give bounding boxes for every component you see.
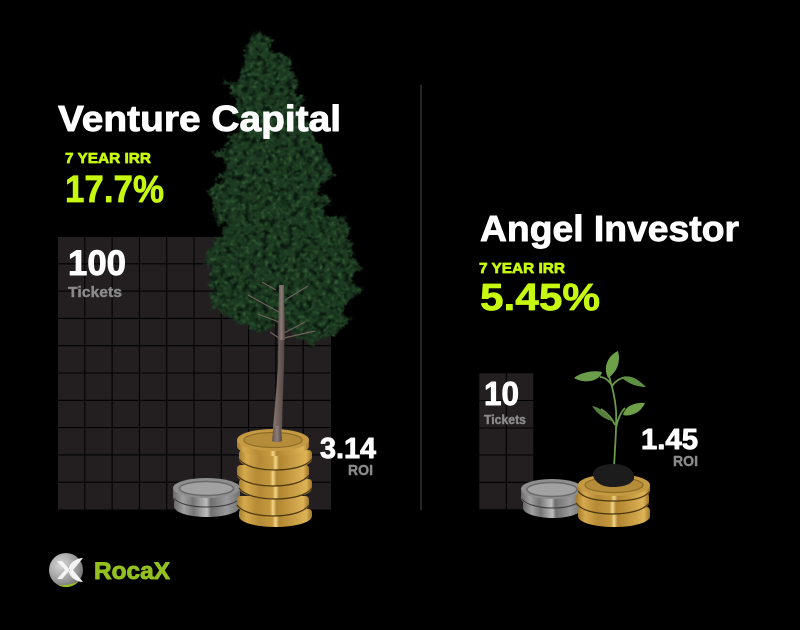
icon: pine tree: [204, 29, 360, 441]
icon: angel gold coin stack: [576, 474, 650, 527]
coin dividers: [576, 491, 650, 514]
label: angel 7 year irr: 7 YEAR IRR: [479, 260, 565, 277]
value: venture irr: 17.7%: [65, 169, 164, 211]
icon: venture silver coins: [173, 478, 240, 517]
leaf lower right: [623, 403, 645, 415]
icon: angel silver coins: [521, 479, 583, 518]
leaf left: [574, 371, 602, 381]
icon: logo mark: [49, 553, 83, 587]
icon: venture gold coin stack: [237, 426, 312, 527]
coin 6: [239, 509, 312, 527]
title: venture capital: Venture Capital: [58, 98, 341, 139]
stem: [600, 376, 626, 468]
coin 2: [239, 450, 312, 470]
label: venture tickets: Tickets: [68, 285, 122, 301]
value: angel roi: 1.45: [641, 424, 698, 456]
coin top rim: [244, 432, 302, 448]
coin 1: [237, 441, 309, 456]
tree base: [272, 426, 282, 442]
upper coin: [578, 486, 650, 501]
logo wordmark: RocaX: [94, 558, 170, 585]
leaf right: [622, 376, 646, 387]
value: venture tickets: 100: [68, 244, 126, 283]
upper trunk over foliage: [278, 285, 285, 340]
value: angel tickets: 10: [484, 375, 519, 412]
middle coin: [576, 493, 649, 514]
tree trunk: [258, 90, 285, 441]
icon: seedling: [574, 351, 646, 487]
logo: rocax: [49, 553, 170, 587]
value: angel irr: 5.45%: [480, 277, 600, 319]
coin top: [578, 474, 650, 496]
label: angel tickets: Tickets: [484, 413, 526, 427]
coin top: [237, 429, 309, 451]
coin top rim: [585, 478, 643, 492]
value: venture roi: 3.14: [320, 433, 376, 465]
lower branches: [248, 282, 315, 338]
foliage: [204, 29, 360, 346]
title: angel investor: Angel Investor: [480, 208, 739, 249]
coin 4: [239, 479, 312, 499]
coin 5: [237, 496, 309, 516]
label: venture 7 year irr: 7 YEAR IRR: [65, 150, 151, 167]
panel: venture capital ticket grid: [58, 237, 331, 510]
coin 3: [237, 465, 309, 486]
leaf top: [606, 351, 619, 378]
label: venture roi: ROI: [348, 463, 373, 479]
label: angel roi: ROI: [673, 454, 698, 470]
soil: [593, 464, 634, 487]
coin dividers: [237, 459, 312, 516]
leaf lower left: [592, 406, 612, 421]
lower coin: [578, 507, 650, 527]
divider: [420, 85, 422, 510]
panel: angel investor ticket grid: [479, 373, 534, 510]
